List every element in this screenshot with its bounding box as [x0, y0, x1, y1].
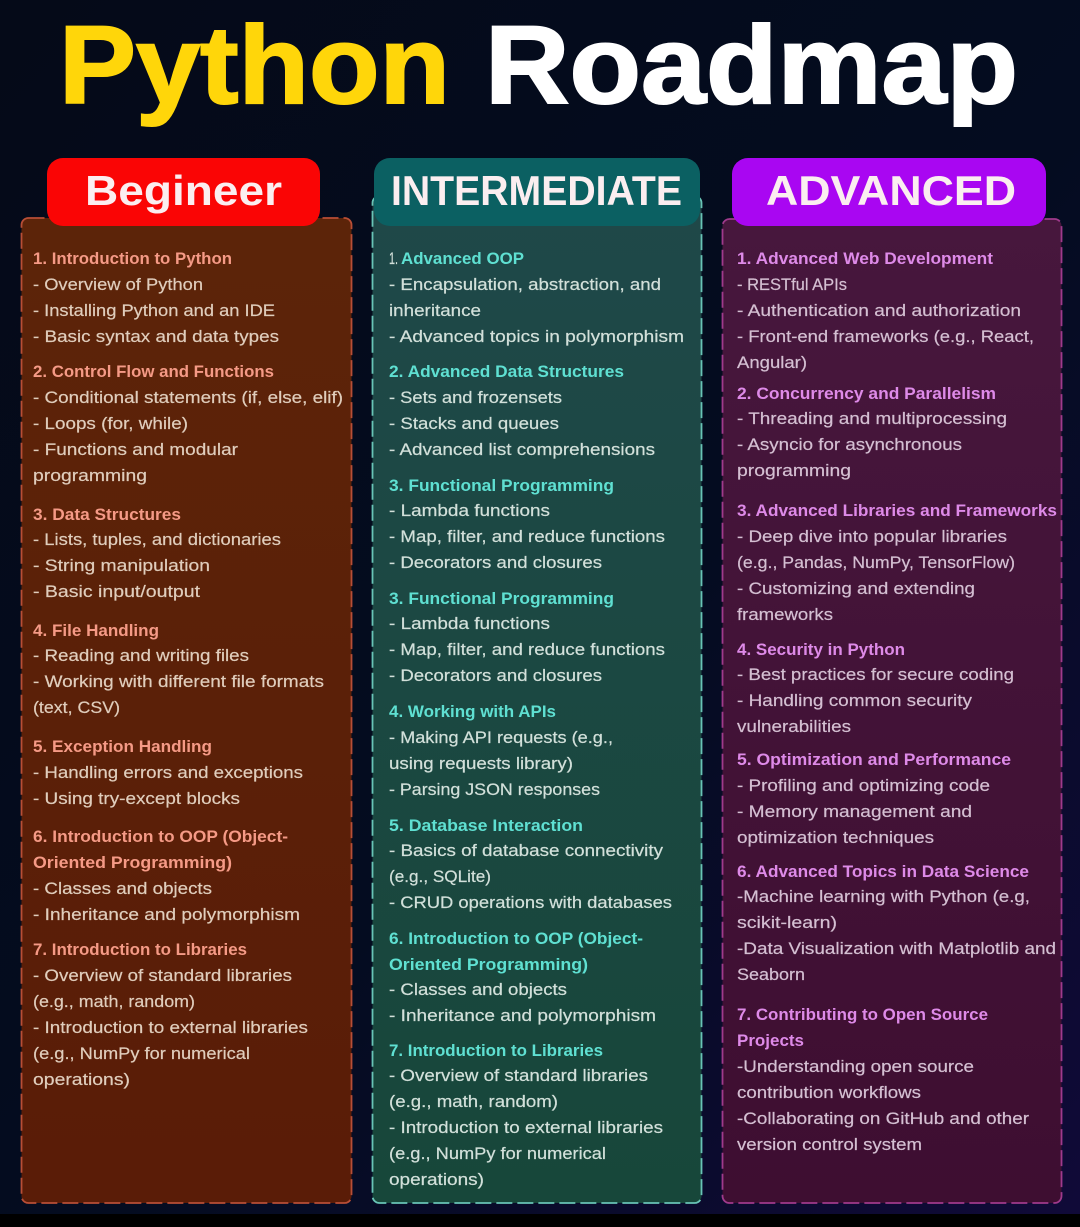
- section: concurrency and parallelism: - Threading and multiprocessing: [737, 409, 1007, 428]
- section: advanced web development: [737, 249, 1034, 372]
- section: introduction to oop: Oriented Programming): [33, 853, 232, 872]
- section: contributing to open source projects: 7. Contributing to Open Source: [737, 1005, 988, 1024]
- section: advanced web development: Angular): [737, 353, 807, 372]
- section: introduction to libraries: (e.g., NumPy for numerical: [389, 1144, 606, 1163]
- section: control flow and functions: - Functions and modular: [33, 440, 238, 459]
- section: contributing to open source projects: -Collaborating on GitHub and other: [737, 1109, 1029, 1128]
- section: advanced topics in data science: -Machine learning with Python (e.g,: [737, 887, 1030, 906]
- heading: Begineer: Begineer: [85, 167, 282, 214]
- section: advanced topics in data science: -Data Visualization with Matplotlib and: [737, 939, 1056, 958]
- section: advanced data structures: - Advanced list comprehensions: [389, 440, 655, 459]
- section: file handling: (text, CSV): [33, 698, 120, 717]
- section: working with apis: 4. Working with APIs: [389, 702, 556, 721]
- section: data structures: - Basic input/output: [33, 582, 200, 601]
- section: introduction to oop: - Inheritance and polymorphism: [389, 1006, 656, 1025]
- section: exception handling: - Handling errors and exceptions: [33, 763, 303, 782]
- section: functional programming repeated: - Map, filter, and reduce functions: [389, 640, 665, 659]
- section: advanced oop: 1.: [389, 249, 398, 268]
- section: data structures: 3. Data Structures: [33, 505, 181, 524]
- section: introduction to libraries: [33, 940, 308, 1089]
- section: control flow and functions: programming: [33, 466, 147, 485]
- section: advanced libraries and frameworks: - Customizing and extending: [737, 579, 975, 598]
- section: functional programming: [389, 476, 665, 572]
- section: advanced libraries and frameworks: - Deep dive into popular libraries: [737, 527, 1007, 546]
- section: file handling: 4. File Handling: [33, 621, 159, 640]
- section: file handling: [33, 621, 324, 717]
- section: advanced topics in data science: [737, 862, 1056, 984]
- section: advanced data structures: - Sets and frozensets: [389, 388, 562, 407]
- section: security in python: [737, 640, 1014, 736]
- section: functional programming repeated: 3. Functional Programming: [389, 589, 614, 608]
- section: database interaction: 5. Database Interaction: [389, 816, 583, 835]
- panel: advanced: [722, 158, 1062, 1203]
- section: database interaction: [389, 816, 672, 912]
- section: introduction to libraries: (e.g., math, random): [33, 992, 195, 1011]
- section: functional programming: - Decorators and closures: [389, 553, 602, 572]
- section: concurrency and parallelism: programming: [737, 461, 851, 480]
- section: introduction to oop: - Classes and objects: [389, 980, 567, 999]
- section: introduction to libraries: (e.g., math, random): [389, 1092, 558, 1111]
- section: introduction to libraries: operations): [389, 1170, 484, 1189]
- section: file handling: - Reading and writing files: [33, 646, 249, 665]
- section: exception handling: - Using try-except blocks: [33, 789, 240, 808]
- section: introduction to oop: [33, 827, 300, 924]
- section: concurrency and parallelism: [737, 384, 1007, 480]
- section: optimization and performance: optimization techniques: [737, 828, 934, 847]
- heading: intermediate: INTERMEDIATE: [391, 167, 682, 214]
- section: introduction to oop: 6. Introduction to OOP (Object-: [389, 929, 643, 948]
- section: advanced data structures: 2. Advanced Data Structures: [389, 362, 624, 381]
- section: working with apis: - Making API requests (e.g.,: [389, 728, 613, 747]
- section: optimization and performance: [737, 750, 1011, 847]
- section: introduction to python: - Installing Python and an IDE: [33, 301, 275, 320]
- section: advanced web development: 1. Advanced Web Development: [737, 249, 993, 268]
- section: introduction to libraries: - Introduction to external libraries: [33, 1018, 308, 1037]
- section: advanced topics in data science: scikit-learn): [737, 913, 837, 932]
- section: advanced topics in data science: 6. Advanced Topics in Data Science: [737, 862, 1029, 881]
- section: database interaction: - Basics of database connectivity: [389, 841, 664, 860]
- section: functional programming: - Lambda functions: [389, 501, 550, 520]
- section: introduction to libraries: - Overview of standard libraries: [389, 1066, 648, 1085]
- section: security in python: - Handling common security: [737, 691, 973, 710]
- section: security in python: - Best practices for secure coding: [737, 665, 1014, 684]
- section: optimization and performance: 5. Optimization and Performance: [737, 750, 1011, 769]
- section: contributing to open source projects: -Understanding open source: [737, 1057, 974, 1076]
- section: exception handling: 5. Exception Handling: [33, 737, 212, 756]
- section: functional programming repeated: - Lambda functions: [389, 614, 550, 633]
- section: advanced web development: - Front-end frameworks (e.g., React,: [737, 327, 1034, 346]
- title: [59, 4, 1018, 127]
- section: introduction to libraries: - Introduction to external libraries: [389, 1118, 663, 1137]
- panel: intermediate: [372, 158, 702, 1203]
- section: advanced data structures: - Stacks and queues: [389, 414, 559, 433]
- section: advanced oop: - Encapsulation, abstraction, and: [389, 275, 661, 294]
- section: introduction to oop: Oriented Programming): [389, 955, 588, 974]
- section: concurrency and parallelism: - Asyncio for asynchronous: [737, 435, 962, 454]
- section: advanced libraries and frameworks: frameworks: [737, 605, 833, 624]
- section: introduction to python: - Basic syntax and data types: [33, 327, 279, 346]
- section: functional programming repeated: [389, 589, 665, 685]
- section: optimization and performance: - Memory management and: [737, 802, 972, 821]
- section: advanced libraries and frameworks: (e.g., Pandas, NumPy, TensorFlow): [737, 553, 1015, 572]
- section: advanced topics in data science: Seaborn: [737, 965, 805, 984]
- section: advanced data structures: [389, 362, 655, 459]
- section: concurrency and parallelism: 2. Concurrency and Parallelism: [737, 384, 996, 403]
- section: functional programming: 3. Functional Programming: [389, 476, 614, 495]
- title: Python: [59, 4, 450, 127]
- section: introduction to oop: 6. Introduction to OOP (Object-: [33, 827, 288, 846]
- heading: advanced: [732, 158, 1046, 226]
- section: introduction to python: 1. Introduction to Python: [33, 249, 232, 268]
- heading: Begineer: [47, 158, 320, 226]
- section: working with apis: - Parsing JSON responses: [389, 780, 600, 799]
- heading: intermediate: [374, 158, 700, 226]
- section: exception handling: [33, 737, 303, 808]
- section: introduction to libraries: 7. Introduction to Libraries: [33, 940, 247, 959]
- title: Roadmap: [485, 4, 1018, 127]
- section: database interaction: - CRUD operations with databases: [389, 893, 672, 912]
- section: control flow and functions: [33, 362, 343, 485]
- section: advanced oop: Advanced OOP: [401, 249, 524, 268]
- section: security in python: 4. Security in Python: [737, 640, 905, 659]
- section: introduction to libraries: [389, 1041, 663, 1189]
- heading: advanced: ADVANCED: [766, 167, 1016, 214]
- section: advanced oop: - Advanced topics in polymorphism: [389, 327, 684, 346]
- section: introduction to libraries: 7. Introduction to Libraries: [389, 1041, 603, 1060]
- section: contributing to open source projects: version control system: [737, 1135, 922, 1154]
- section: introduction to oop: - Inheritance and polymorphism: [33, 905, 300, 924]
- section: control flow and functions: - Conditional statements (if, else, elif): [33, 388, 343, 407]
- section: working with apis: using requests library): [389, 754, 573, 773]
- section: working with apis: [389, 702, 613, 799]
- section: data structures: - Lists, tuples, and dictionaries: [33, 530, 281, 549]
- section: database interaction: (e.g., SQLite): [389, 867, 491, 886]
- section: introduction to libraries: operations): [33, 1070, 130, 1089]
- section: introduction to libraries: - Overview of standard libraries: [33, 966, 292, 985]
- panel: beginner: [22, 158, 352, 1203]
- section: functional programming repeated: - Decorators and closures: [389, 666, 602, 685]
- section: introduction to python: - Overview of Python: [33, 275, 203, 294]
- section: control flow and functions: 2. Control Flow and Functions: [33, 362, 274, 381]
- section: contributing to open source projects: contribution workflows: [737, 1083, 921, 1102]
- section: advanced web development: - RESTful APIs: [737, 275, 847, 294]
- section: introduction to python: [33, 249, 279, 346]
- section: introduction to oop: [389, 929, 656, 1025]
- section: security in python: vulnerabilities: [737, 717, 851, 736]
- section: advanced oop: [389, 249, 684, 346]
- section: data structures: [33, 505, 281, 601]
- section: data structures: - String manipulation: [33, 556, 210, 575]
- section: advanced libraries and frameworks: [737, 501, 1057, 624]
- section: functional programming: - Map, filter, and reduce functions: [389, 527, 665, 546]
- section: contributing to open source projects: Projects: [737, 1031, 804, 1050]
- section: file handling: - Working with different file formats: [33, 672, 324, 691]
- section: contributing to open source projects: [737, 1005, 1029, 1154]
- section: advanced libraries and frameworks: 3. Advanced Libraries and Frameworks: [737, 501, 1057, 520]
- section: introduction to libraries: (e.g., NumPy for numerical: [33, 1044, 250, 1063]
- section: advanced web development: - Authentication and authorization: [737, 301, 1021, 320]
- section: advanced oop: inheritance: [389, 301, 481, 320]
- section: introduction to oop: - Classes and objects: [33, 879, 212, 898]
- section: optimization and performance: - Profiling and optimizing code: [737, 776, 990, 795]
- section: control flow and functions: - Loops (for, while): [33, 414, 188, 433]
